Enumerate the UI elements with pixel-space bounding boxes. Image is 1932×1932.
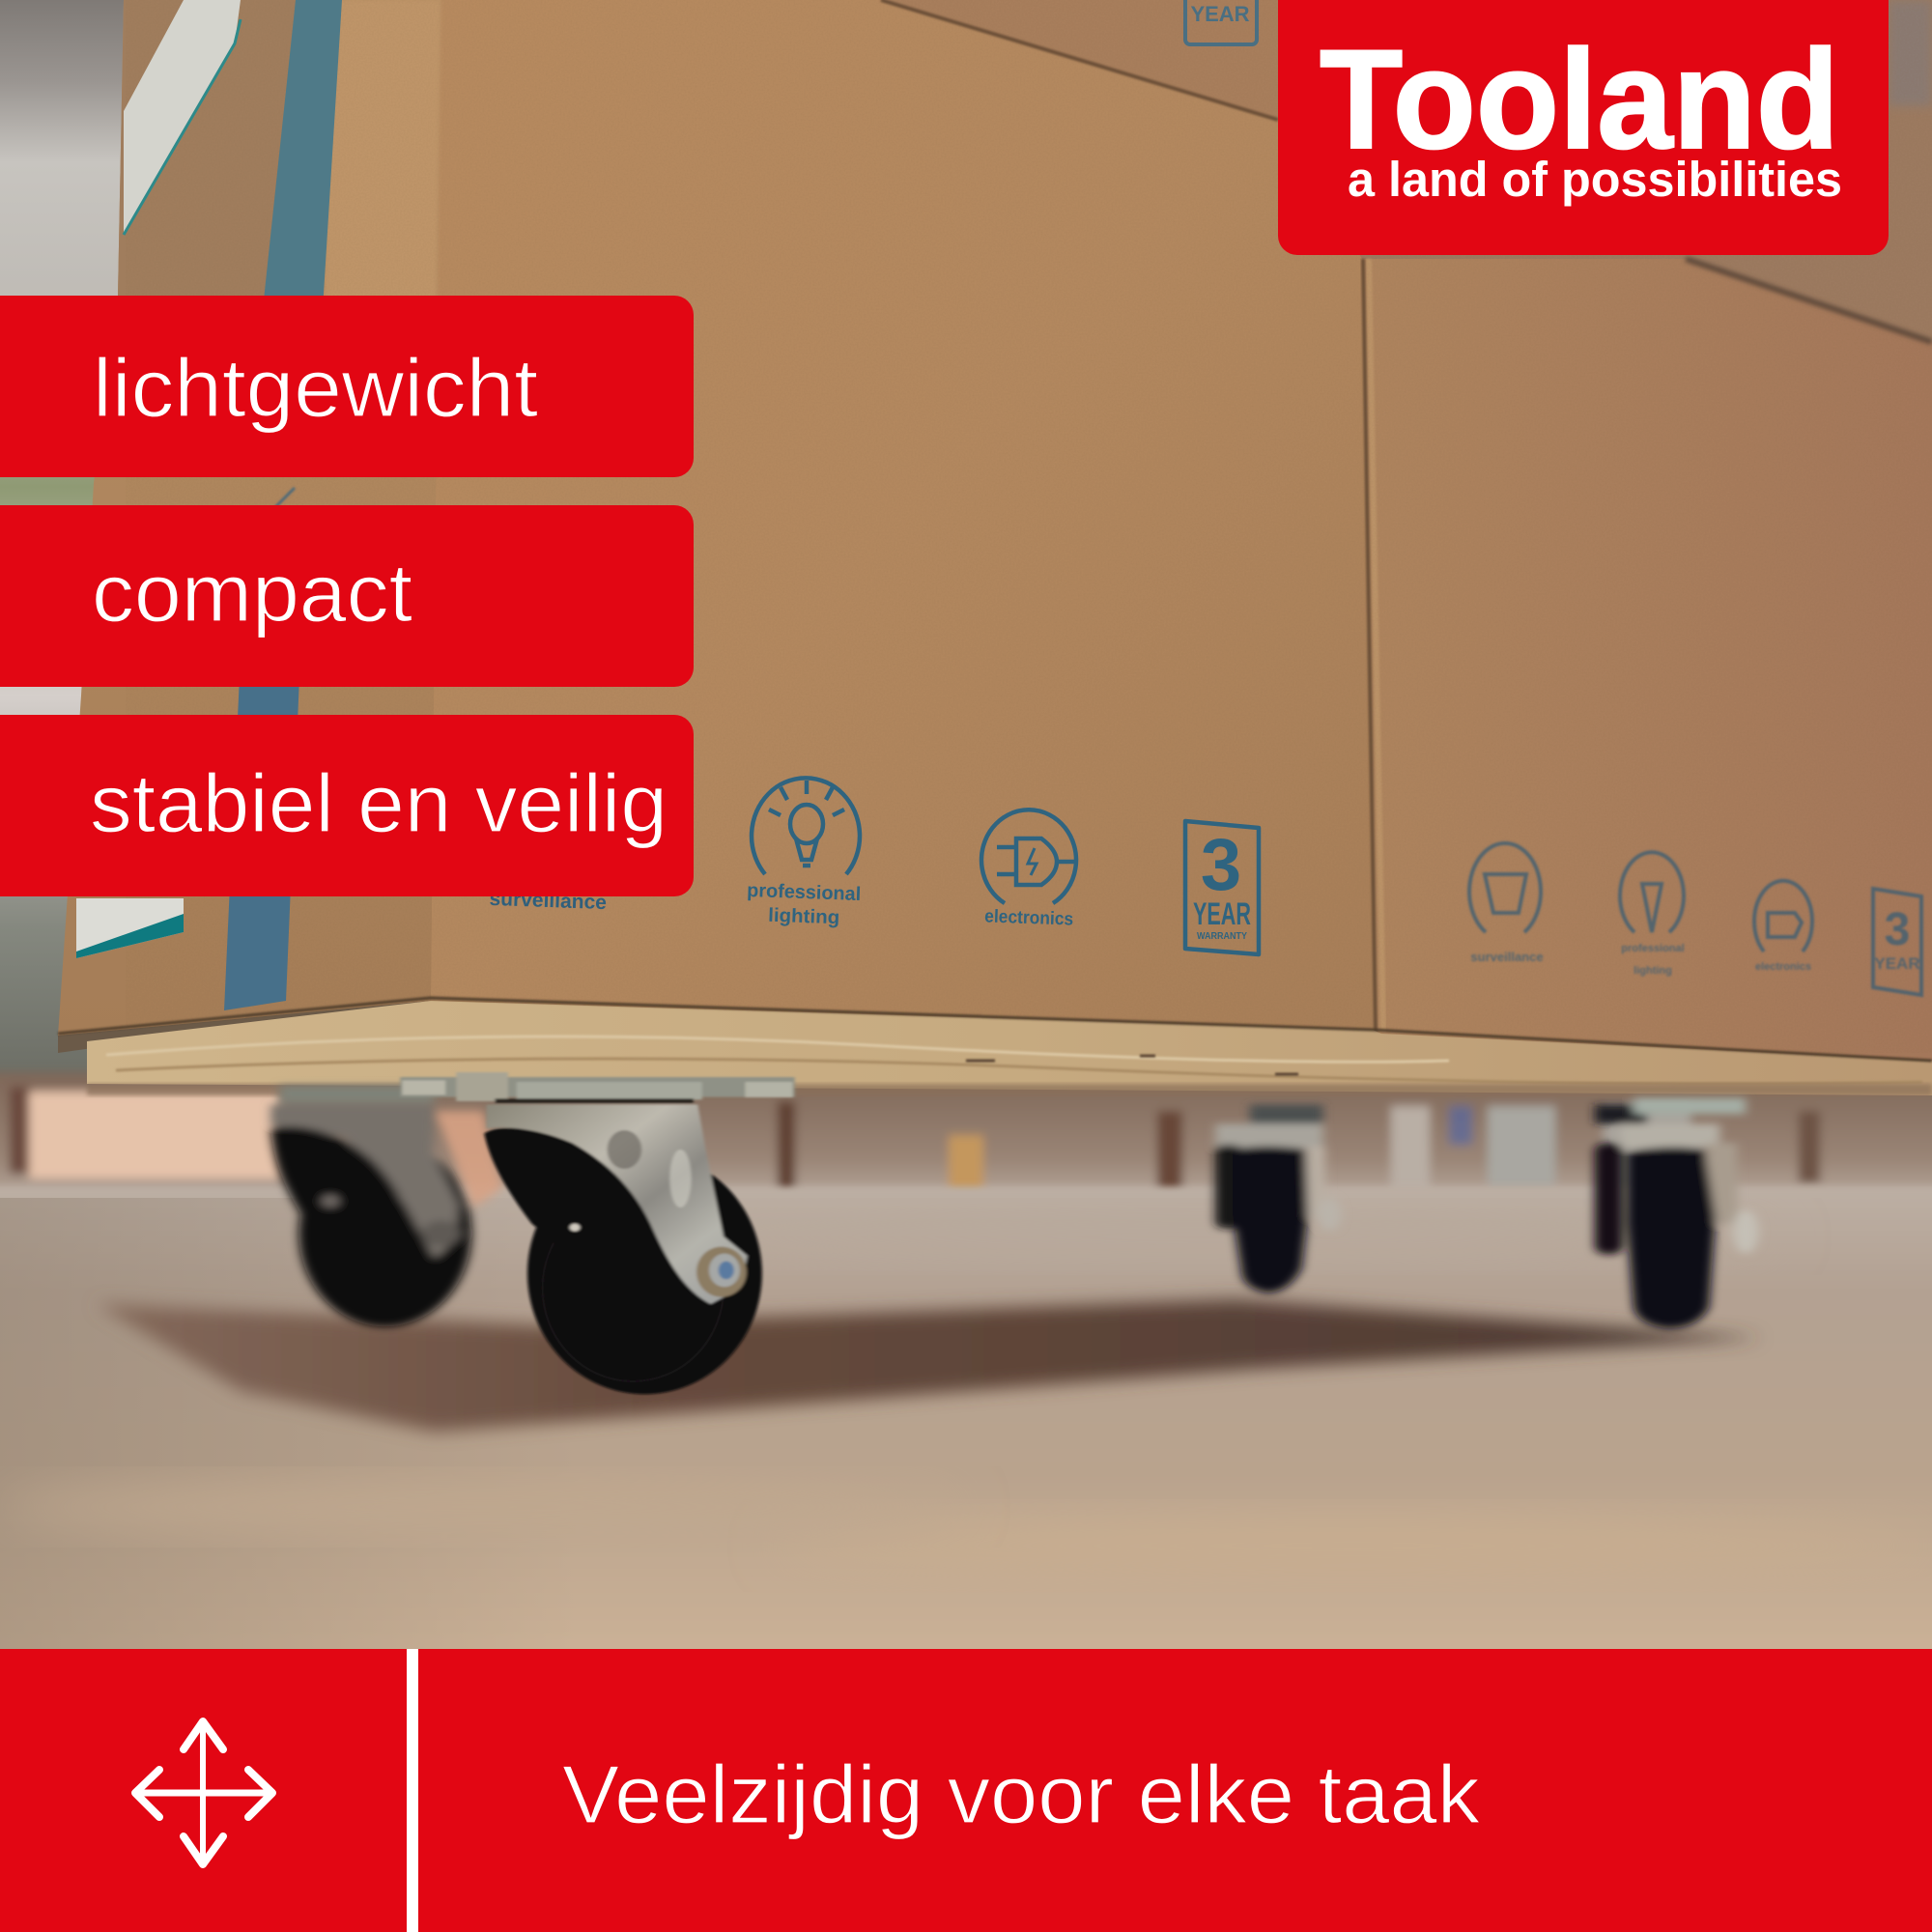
teal strap on box, lower part	[224, 676, 299, 1010]
bottom banner	[0, 1649, 1932, 1932]
rear right caster wheels	[1215, 1098, 1758, 1328]
white shipping label, top	[124, 0, 241, 235]
plywood dolly board	[58, 998, 1932, 1095]
photo background: wall at left	[0, 0, 124, 1077]
top right box	[1352, 0, 1932, 348]
label teal edge	[76, 914, 184, 958]
box icon: 3 year warranty: YEAR	[1193, 896, 1251, 931]
cropped warranty icon at top of the image	[1185, 0, 1257, 44]
box icon: 3 year warranty: 3	[1201, 824, 1241, 906]
banner divider	[407, 1649, 418, 1932]
box icon: 3 year warranty: WARRANTY	[1197, 931, 1247, 942]
white shipping label, bottom	[76, 898, 184, 958]
front left caster wheel	[400, 1072, 795, 1394]
feature chip: lichtgewicht: lichtgewicht	[93, 343, 538, 435]
cardboard grain	[126, 0, 1932, 1053]
feature chip: compact	[0, 505, 694, 687]
box icon: professional lighting: professional	[747, 880, 862, 905]
box icon: professional lighting	[747, 778, 862, 928]
box icon: electronics	[981, 810, 1076, 930]
glow between the left casters	[435, 1111, 502, 1208]
box print: surveillance caption: surveillance	[489, 888, 607, 914]
logo wordmark: Tooland	[1320, 20, 1839, 178]
rear left caster wheel	[270, 1085, 471, 1326]
main box: left face	[58, 0, 440, 1036]
feature chip: lichtgewicht	[0, 296, 694, 477]
blurred box icons on the right box	[1469, 843, 1921, 995]
logo tagline: a land of possibilities	[1348, 152, 1842, 207]
right cardboard box	[1890, 336, 1932, 1059]
small mark on box	[275, 488, 295, 507]
photo background: blurred warehouse behind the wheels	[0, 1072, 1932, 1190]
seam of the top right box	[1686, 259, 1932, 342]
feature chip: stabiel en veilig: stabiel en veilig	[90, 758, 668, 850]
box icon: professional lighting: lighting	[768, 905, 840, 928]
blurred box icons on the right box: YEAR	[1874, 954, 1920, 973]
main box: top seam	[881, 0, 1278, 120]
box icon: electronics: electronics	[984, 906, 1074, 930]
logo panel	[1278, 0, 1889, 255]
banner text: Veelzijdig voor elke taak	[562, 1749, 1481, 1841]
teal strap on box, upper part	[263, 0, 342, 309]
icon: four-way arrows	[135, 1721, 272, 1864]
right wall corner	[1889, 0, 1932, 106]
floor shadow under the dolly	[97, 1299, 1763, 1432]
main box: front face	[431, 0, 1373, 1030]
cropped warranty icon at top of the image: YEAR	[1190, 2, 1250, 26]
blurred box icons on the right box: lighting	[1634, 965, 1672, 977]
photo background: wooden floor	[0, 1182, 1932, 1649]
blurred box icons on the right box: surveillance	[1470, 950, 1544, 964]
box icon: 3 year warranty	[1185, 821, 1259, 954]
blurred box icons on the right box: professional	[1621, 943, 1685, 954]
top box behind main box	[874, 0, 1352, 130]
label teal edge, top	[124, 19, 241, 235]
blurred box icons on the right box: electronics	[1755, 961, 1811, 973]
blurred box icons on the right box: 3	[1885, 904, 1910, 955]
feature chip: compact: compact	[92, 548, 412, 639]
feature chip: stabiel en veilig	[0, 715, 694, 896]
main box: corner flap	[324, 0, 440, 299]
box seam between main and right box	[1363, 259, 1383, 1032]
main box: darker left panel at top	[118, 0, 299, 296]
